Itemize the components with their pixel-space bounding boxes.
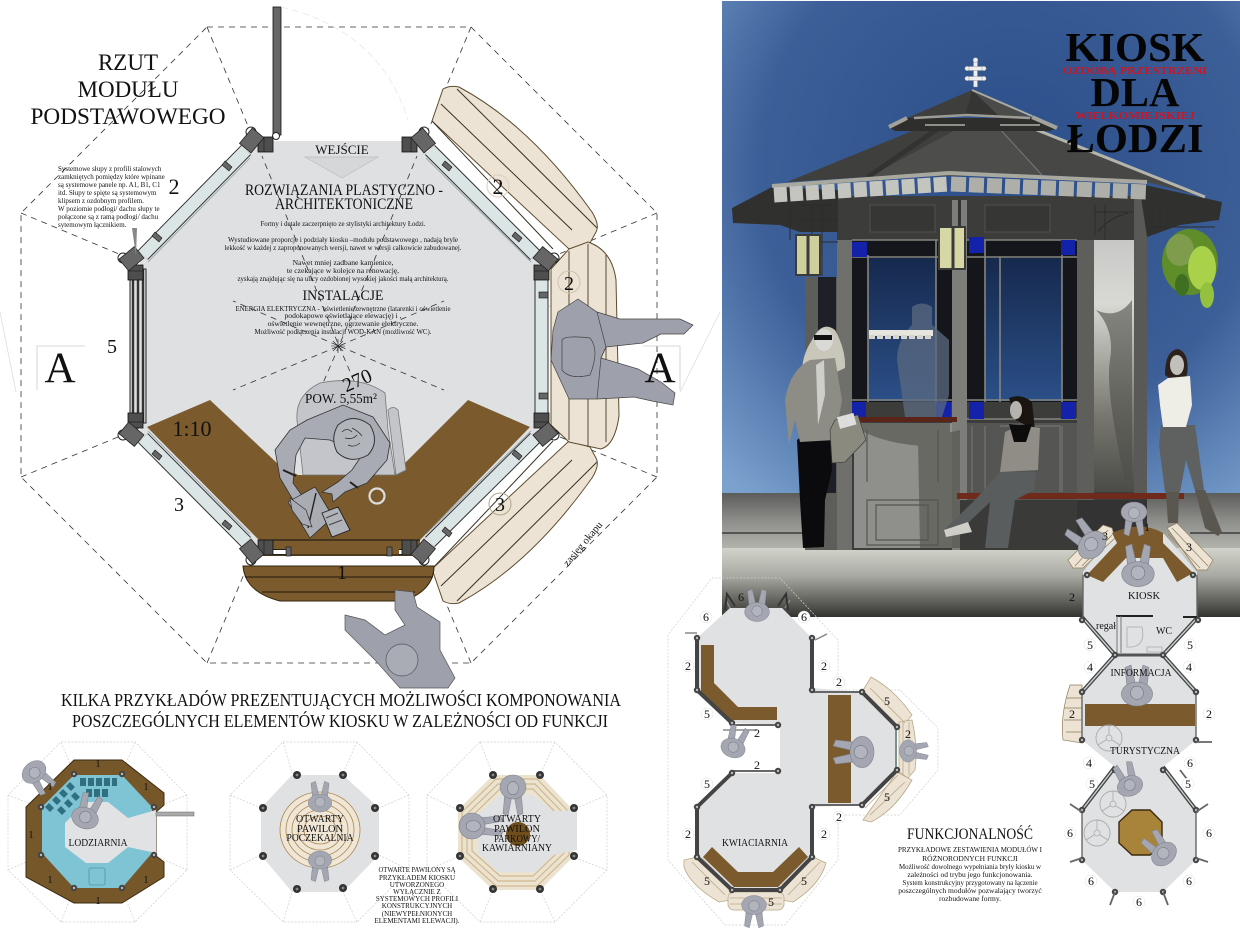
fascia bbox=[772, 173, 1147, 186]
numbers: 6 bbox=[1136, 895, 1142, 909]
labels: KIOSK bbox=[1128, 591, 1160, 602]
heading: RZUT: PODSTAWOWEGO bbox=[30, 104, 226, 129]
bench 3 lower right bbox=[432, 441, 597, 604]
person middle left bbox=[718, 722, 752, 761]
label: LODZIARNIA bbox=[68, 837, 128, 849]
chair bbox=[297, 381, 406, 475]
wooden table bbox=[1119, 810, 1162, 855]
section marks: A bbox=[644, 345, 676, 392]
text block: design: ARCHITEKTONICZNE bbox=[275, 196, 413, 213]
numbers: 1 bbox=[96, 759, 100, 770]
numbers: 1 bbox=[28, 830, 34, 841]
centre star bbox=[331, 339, 345, 353]
cap bbox=[889, 118, 1057, 131]
numbers: 1 bbox=[144, 782, 148, 793]
panel numbers: 5 bbox=[107, 336, 117, 358]
roof bbox=[772, 90, 1205, 197]
central pillar bbox=[952, 200, 967, 550]
panel: kiosk, information, tourist module stack bbox=[1061, 502, 1215, 909]
sky bbox=[722, 1, 1240, 493]
panel numbers: 1 bbox=[337, 562, 347, 584]
label: KWIACIARNIA bbox=[722, 838, 789, 849]
labels: WC bbox=[1156, 626, 1172, 637]
panel: flower shop module group bbox=[668, 578, 938, 928]
hanging plant bbox=[1162, 229, 1218, 308]
numbers: 6 bbox=[738, 590, 744, 604]
panel numbers bbox=[101, 174, 580, 584]
heading: RZUT: MODUŁU bbox=[78, 77, 179, 102]
walls and posts bbox=[685, 600, 900, 893]
heading: composition examples bbox=[61, 689, 621, 731]
numbers: 5 bbox=[801, 874, 807, 888]
title: KIOSK DLA ŁODZI: KIOSK bbox=[1066, 24, 1205, 70]
lantern centre bbox=[939, 200, 965, 269]
numbers: 1 bbox=[48, 875, 52, 886]
text block: functionality: PRZYKŁADOWE ZESTAWIENIA MODUŁÓW I bbox=[898, 844, 1042, 854]
panel numbers: 2 bbox=[492, 174, 504, 199]
numbers: 5 bbox=[1089, 777, 1095, 791]
right window bbox=[967, 240, 1077, 402]
floor bbox=[140, 141, 538, 549]
kiosk counter bbox=[1087, 543, 1193, 582]
bench 2 right bbox=[551, 242, 619, 449]
person: tourist bbox=[1110, 759, 1146, 800]
note: system posts: sytemowym łącznikiem. bbox=[58, 221, 127, 229]
entrance label bbox=[305, 142, 378, 178]
numbers: 2 bbox=[1069, 590, 1075, 604]
text block: functionality: FUNKCJONALNOŚĆ bbox=[907, 824, 1033, 843]
note: system posts: Systemowe słupy z profili stalowych bbox=[58, 165, 162, 173]
right lower panel bbox=[967, 423, 1077, 550]
display cases bbox=[45, 778, 117, 815]
labels bbox=[1096, 591, 1181, 757]
scale: 1:10 bbox=[172, 416, 212, 441]
caption: open pavilions: PRZYKŁADEM KIOSKU bbox=[379, 874, 455, 882]
person at front bbox=[345, 590, 455, 688]
heading: RZUT: RZUT bbox=[98, 50, 158, 75]
posts bbox=[259, 771, 379, 893]
label: PAWILON bbox=[297, 824, 343, 835]
interior dashed roof lines bbox=[233, 156, 444, 520]
text block: installations: oświetlenie wewnętrzne, ogrzewanie elektryczne. bbox=[268, 319, 418, 328]
text block: design: te czekające w kolejce na renowację, bbox=[287, 266, 399, 275]
text block: design: ROZWIĄZANIA PLASTYCZNO - bbox=[245, 182, 443, 199]
numbers: 5 bbox=[1087, 638, 1093, 652]
caption: open pavilions bbox=[375, 866, 460, 925]
numbers: 4 bbox=[1087, 660, 1093, 674]
numbers: 2 bbox=[754, 726, 760, 740]
numbers: 5 bbox=[1185, 777, 1191, 791]
section marks: A bbox=[44, 345, 76, 392]
text block: installations: Możliwość podłączenia instalacji WOD-KAN (możliwość WC). bbox=[254, 327, 432, 336]
eave soffit left bbox=[732, 187, 838, 232]
numbers: 1 bbox=[1144, 520, 1150, 534]
numbers: 1 bbox=[48, 782, 52, 793]
person at counter bbox=[275, 405, 390, 527]
bench bbox=[957, 493, 1184, 499]
numbers: 6 bbox=[703, 610, 709, 624]
person left bbox=[459, 813, 503, 839]
caption: open pavilions: ELEMENTAMI ELEWACJI). bbox=[375, 917, 460, 925]
panel: open park pavilion bbox=[427, 742, 607, 922]
caption: open pavilions: KONSTRUKCYJNYCH bbox=[382, 902, 452, 910]
round table bbox=[506, 822, 530, 846]
floor bbox=[697, 608, 897, 890]
person: information bbox=[1121, 665, 1153, 706]
structural posts bbox=[118, 127, 559, 565]
posts bbox=[456, 771, 578, 893]
numbers bbox=[28, 759, 148, 907]
benches bbox=[684, 677, 916, 910]
panel numbers: 2 bbox=[168, 174, 180, 199]
guide lines bbox=[668, 578, 938, 925]
caption: open pavilions: WYŁĄCZNIE Z bbox=[393, 888, 441, 896]
person bottom bbox=[308, 851, 332, 882]
cup bbox=[370, 488, 384, 504]
paper, pen and phone bbox=[288, 487, 350, 538]
label: PARKOWY/ bbox=[494, 834, 540, 845]
labels: regał bbox=[1096, 621, 1116, 632]
numbers: 5 bbox=[704, 777, 710, 791]
roof overhang outline bbox=[21, 27, 657, 663]
note: system posts: są systemowe panele np. A1, B1, C1 bbox=[58, 181, 161, 189]
walls and posts bbox=[1079, 572, 1201, 895]
eave note: zasięg okapu bbox=[562, 519, 606, 569]
numbers: 5 bbox=[704, 707, 710, 721]
pointer arrow bbox=[132, 228, 137, 256]
panel: main floor plan bbox=[0, 7, 720, 688]
panel numbers: 3 bbox=[174, 494, 184, 516]
section marks bbox=[37, 345, 680, 392]
area label: POW. 5,55m² bbox=[305, 392, 377, 407]
numbers: 1 bbox=[144, 875, 148, 886]
top bench bbox=[1112, 526, 1163, 543]
beige bench ring bbox=[458, 775, 573, 890]
window awning bbox=[869, 330, 933, 336]
note: system posts: połączone są z ramą podłogi/ dachu bbox=[58, 213, 159, 221]
numbers: 6 bbox=[1088, 874, 1094, 888]
label: POCZEKALNIA bbox=[286, 833, 354, 844]
numbers: 1 bbox=[96, 896, 100, 907]
numbers: 3 bbox=[1102, 529, 1108, 543]
text block: installations: INSTALACJE bbox=[302, 288, 384, 304]
person: table bbox=[1137, 826, 1181, 871]
text block: design: Nawet mniej zadbane kamienice, bbox=[293, 258, 393, 267]
numbers: 2 bbox=[685, 659, 691, 673]
kiosk body bbox=[805, 196, 1147, 550]
label: OTWARTY bbox=[493, 814, 541, 825]
person on right bench bbox=[551, 299, 693, 405]
heading: composition examples: POSZCZEGÓLNYCH ELEMENTÓW KIOSKU W ZALEŻNOŚCI OD FUNKCJI bbox=[72, 710, 608, 731]
numbers: 2 bbox=[685, 827, 691, 841]
blue glass panes bbox=[852, 237, 1076, 419]
seated woman bbox=[944, 396, 1040, 548]
staff bbox=[69, 790, 106, 833]
WC fittings bbox=[1127, 627, 1162, 652]
numbers: 2 bbox=[754, 758, 760, 772]
lantern left bbox=[796, 235, 820, 275]
text block: functionality: Możliwość dowolnego wypełniania bryły kiosku w bbox=[899, 862, 1042, 871]
text block: installations bbox=[236, 288, 451, 336]
numbers: 5 bbox=[1187, 638, 1193, 652]
ground band bbox=[722, 493, 1240, 548]
shields bbox=[774, 184, 949, 195]
heading: RZUT bbox=[30, 50, 226, 129]
labels: TURYSTYCZNA bbox=[1110, 746, 1181, 757]
woman with bag bbox=[785, 327, 866, 548]
note: system posts: W poziomie podłogi/ dachu słupy te bbox=[58, 205, 160, 213]
numbers: 6 bbox=[1186, 874, 1192, 888]
entrance wings bbox=[1070, 742, 1212, 905]
person: kiosk customer bbox=[1121, 502, 1147, 536]
numbers: 6 bbox=[1067, 826, 1073, 840]
eave soffit right bbox=[1140, 185, 1222, 237]
title: KIOSK DLA ŁODZI: DLA bbox=[1090, 69, 1180, 115]
entrance label: WEJŚCIE bbox=[315, 142, 369, 157]
text block: installations: podokapowe oświetlające elewację) i , bbox=[284, 311, 402, 320]
text block: design: lekkość w każdej z zaproponowanych wersji, nawet w wersji całkowicie zabudowanej. bbox=[224, 243, 462, 252]
roof ornament cross bbox=[965, 58, 986, 87]
note: system posts: zamkniętych pomiędzy które wpinane bbox=[58, 173, 165, 181]
lattice brackets bbox=[790, 205, 1215, 276]
information counter bbox=[1085, 704, 1195, 726]
person inside window bbox=[897, 304, 949, 417]
brown benches ring bbox=[26, 760, 164, 903]
panel: open waiting pavilion bbox=[230, 742, 409, 922]
person top bbox=[308, 781, 332, 812]
numbers: 3 bbox=[1186, 540, 1192, 554]
numbers: 6 bbox=[801, 610, 807, 624]
text block: functionality: poszczególnych modułów pozwalający tworzyć bbox=[898, 886, 1042, 895]
street bbox=[722, 548, 1240, 617]
label: OTWARTY bbox=[296, 814, 344, 825]
text block: functionality: System konstrukcyjny przygotowany na łączenie bbox=[902, 878, 1038, 887]
person top bbox=[745, 589, 769, 622]
numbers: 5 bbox=[768, 895, 774, 909]
numbers: 2 bbox=[836, 675, 842, 689]
sidewalk lines bbox=[722, 532, 1240, 534]
entrance door bbox=[272, 7, 408, 140]
floor bbox=[478, 795, 577, 872]
text block: functionality: RÓŻNORODNYCH FUNKCJI bbox=[922, 853, 1018, 863]
entrance wings top bbox=[725, 594, 788, 610]
heading: composition examples: KILKA PRZYKŁADÓW PREZENTUJĄCYCH MOŻLIWOŚCI KOMPONOWANIA bbox=[61, 689, 621, 710]
text block: design: Wystudiowane proporcje i podziały kiosku –modułu podstawowego , nadają bryle bbox=[228, 235, 459, 244]
caption: open pavilions: SYSTEMOWYCH PROFILI bbox=[376, 895, 459, 903]
counters bbox=[701, 645, 851, 887]
numbers bbox=[682, 590, 911, 909]
circular bench bbox=[280, 792, 360, 868]
door bbox=[156, 812, 194, 816]
bench 1 bbox=[243, 555, 434, 601]
text block: functionality: zależności od trybu jego funkcjonowania. bbox=[907, 870, 1033, 879]
person at counter bbox=[833, 736, 874, 768]
person: bench bbox=[1061, 514, 1112, 565]
inner floor bbox=[65, 802, 156, 863]
title: KIOSK DLA ŁODZI: OZDOBĄ PRZESTRZENI bbox=[1063, 65, 1207, 77]
panel: kiosk visualization bbox=[722, 1, 1240, 617]
blue floor bbox=[42, 775, 152, 888]
mullions bbox=[852, 240, 1077, 419]
frieze panels bbox=[870, 205, 1050, 232]
text block: design bbox=[224, 182, 462, 283]
woman standing bbox=[1158, 349, 1222, 536]
brown counter bbox=[147, 400, 530, 556]
note: system posts bbox=[58, 165, 165, 229]
numbers: 4 bbox=[1186, 660, 1192, 674]
person bottom bbox=[742, 896, 766, 928]
panel numbers: 2 bbox=[564, 273, 574, 295]
title: KIOSK DLA ŁODZI: ŁODZI bbox=[1066, 115, 1204, 161]
mural bbox=[1094, 240, 1134, 492]
bench 2 upper right bbox=[432, 86, 597, 249]
numbers: 5 bbox=[704, 874, 710, 888]
text block: installations: ENERGIA ELEKTRYCZNA - 'oświetlenie'zewnętrzne (latarenki i oświetlenie bbox=[236, 304, 451, 313]
person: kiosk staff bbox=[1122, 544, 1154, 586]
text block: design: Formy i detale zaczerpnięto ze stylistyki architektury Łodzi. bbox=[260, 219, 426, 228]
panel: ice cream shop plan bbox=[8, 742, 194, 922]
numbers: 4 bbox=[1086, 756, 1092, 770]
numbers: 5 bbox=[884, 790, 890, 804]
numbers: 5 bbox=[884, 694, 890, 708]
benches bbox=[1062, 523, 1213, 743]
text block: functionality bbox=[898, 824, 1042, 903]
counter shadow bbox=[859, 423, 960, 548]
section line A-A bbox=[0, 304, 720, 468]
posts bbox=[38, 771, 157, 891]
label: KAWIARNIANY bbox=[482, 843, 552, 854]
note: system posts: klipsem z ozdobnym profilem. bbox=[58, 197, 144, 205]
labels: INFORMACJA bbox=[1110, 668, 1172, 679]
counter bbox=[859, 417, 957, 422]
glazed wall panels bbox=[130, 150, 548, 556]
numbers bbox=[1064, 520, 1215, 909]
title: KIOSK DLA ŁODZI bbox=[1063, 24, 1207, 161]
customer bbox=[18, 756, 59, 799]
lower door bbox=[1077, 500, 1147, 550]
numbers: 2 bbox=[821, 659, 827, 673]
text block: functionality: rozbudowane formy. bbox=[939, 894, 1001, 903]
numbers: 6 bbox=[1206, 826, 1212, 840]
numbers: 2 bbox=[836, 810, 842, 824]
label bbox=[482, 814, 552, 854]
numbers: 2 bbox=[1206, 707, 1212, 721]
numbers: 6 bbox=[1187, 756, 1193, 770]
title: KIOSK DLA ŁODZI: WIELKOMIEJSKIEJ bbox=[1075, 110, 1196, 122]
left window bbox=[852, 240, 952, 402]
numbers: 2 bbox=[1069, 707, 1075, 721]
label: PAWILON bbox=[494, 824, 540, 835]
text block: design: zyskają znajdując się na ulicy ozdobionej wysokiej jakości małą architekturą. bbox=[238, 274, 449, 283]
caption: open pavilions: (NIEWYPEŁNIONYCH bbox=[382, 910, 452, 918]
right wall bbox=[1077, 240, 1094, 550]
person right bbox=[900, 740, 928, 762]
floor bbox=[1082, 534, 1197, 892]
ceiling height: 270 bbox=[339, 365, 376, 397]
numbers: 2 bbox=[821, 827, 827, 841]
counter square bbox=[89, 868, 105, 885]
numbers: 2 bbox=[905, 727, 911, 741]
label bbox=[286, 814, 354, 844]
seats bbox=[1084, 725, 1126, 846]
caption: open pavilions: UTWORZONEGO bbox=[390, 881, 444, 889]
person top bbox=[500, 775, 526, 816]
caption: open pavilions: OTWARTE PAWILONY SĄ bbox=[378, 866, 456, 874]
note: system posts: itd. Słupy te spięte są systemowym bbox=[58, 189, 157, 197]
left lower panel bbox=[854, 423, 952, 548]
panel numbers: 3 bbox=[495, 494, 505, 516]
